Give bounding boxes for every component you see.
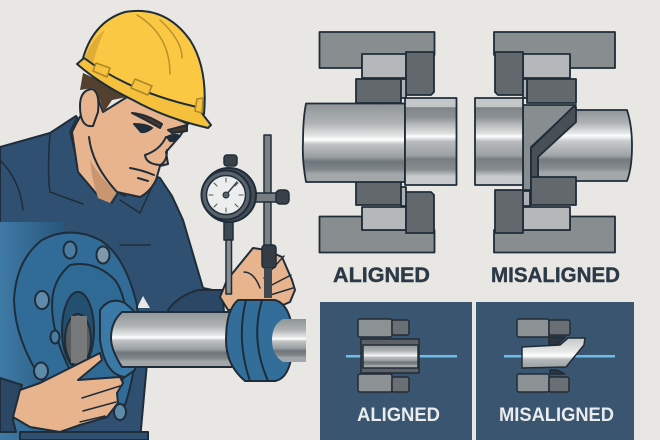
bearing blocks bbox=[523, 54, 570, 230]
jaw line bbox=[89, 137, 125, 196]
shaft coupling bbox=[226, 300, 306, 381]
aligned label: ALIGNED bbox=[357, 405, 440, 426]
gray web bbox=[523, 105, 576, 190]
sleeve bbox=[475, 98, 523, 185]
shaft bbox=[303, 104, 405, 182]
misaligned icon bbox=[517, 319, 585, 392]
panel: aligned summary bbox=[320, 302, 472, 440]
misaligned coupling diagram bbox=[475, 32, 632, 252]
hard hat bbox=[77, 11, 211, 128]
aligned coupling diagram bbox=[303, 32, 456, 252]
lower hand bbox=[13, 353, 123, 432]
top housing bbox=[320, 32, 434, 68]
misaligned label: MISALIGNED bbox=[499, 405, 614, 426]
coverall details bbox=[0, 119, 155, 245]
sleeve bbox=[405, 98, 456, 185]
gap between torso and arm bbox=[137, 296, 150, 308]
worker illustration bbox=[0, 11, 306, 440]
steel shaft bbox=[111, 312, 232, 367]
centre line bbox=[346, 355, 457, 358]
lower hand fingers bbox=[80, 386, 120, 422]
lower block bbox=[531, 177, 576, 205]
neck shadow bbox=[90, 160, 117, 203]
worker neck and face bbox=[72, 90, 188, 198]
dial gauge and stand bbox=[202, 135, 289, 298]
left sleeve bbox=[0, 378, 22, 432]
aligned icon bbox=[358, 319, 419, 392]
bottom housing bbox=[494, 216, 615, 252]
panel: misaligned summary bbox=[476, 302, 634, 440]
bottom housing bbox=[320, 216, 434, 252]
eyes, brows, mouth bbox=[130, 113, 187, 181]
worker sleeve bbox=[168, 290, 224, 314]
pump flange bbox=[14, 232, 138, 420]
top housing bbox=[494, 32, 615, 68]
right shaft end bbox=[272, 319, 306, 362]
angled shaft bbox=[538, 110, 632, 181]
ear bbox=[80, 89, 98, 126]
pump base bbox=[20, 432, 148, 440]
worker torso: navy coverall bbox=[0, 116, 222, 440]
centre line bbox=[504, 355, 615, 358]
upper hand holding rod bbox=[220, 248, 295, 310]
hair bbox=[80, 73, 127, 112]
bearing blocks bbox=[362, 54, 406, 230]
label: aligned: ALIGNED bbox=[333, 264, 430, 287]
label: misaligned: MISALIGNED bbox=[491, 264, 620, 287]
pump casing bbox=[0, 222, 64, 440]
dark diagonal band bbox=[531, 107, 576, 177]
